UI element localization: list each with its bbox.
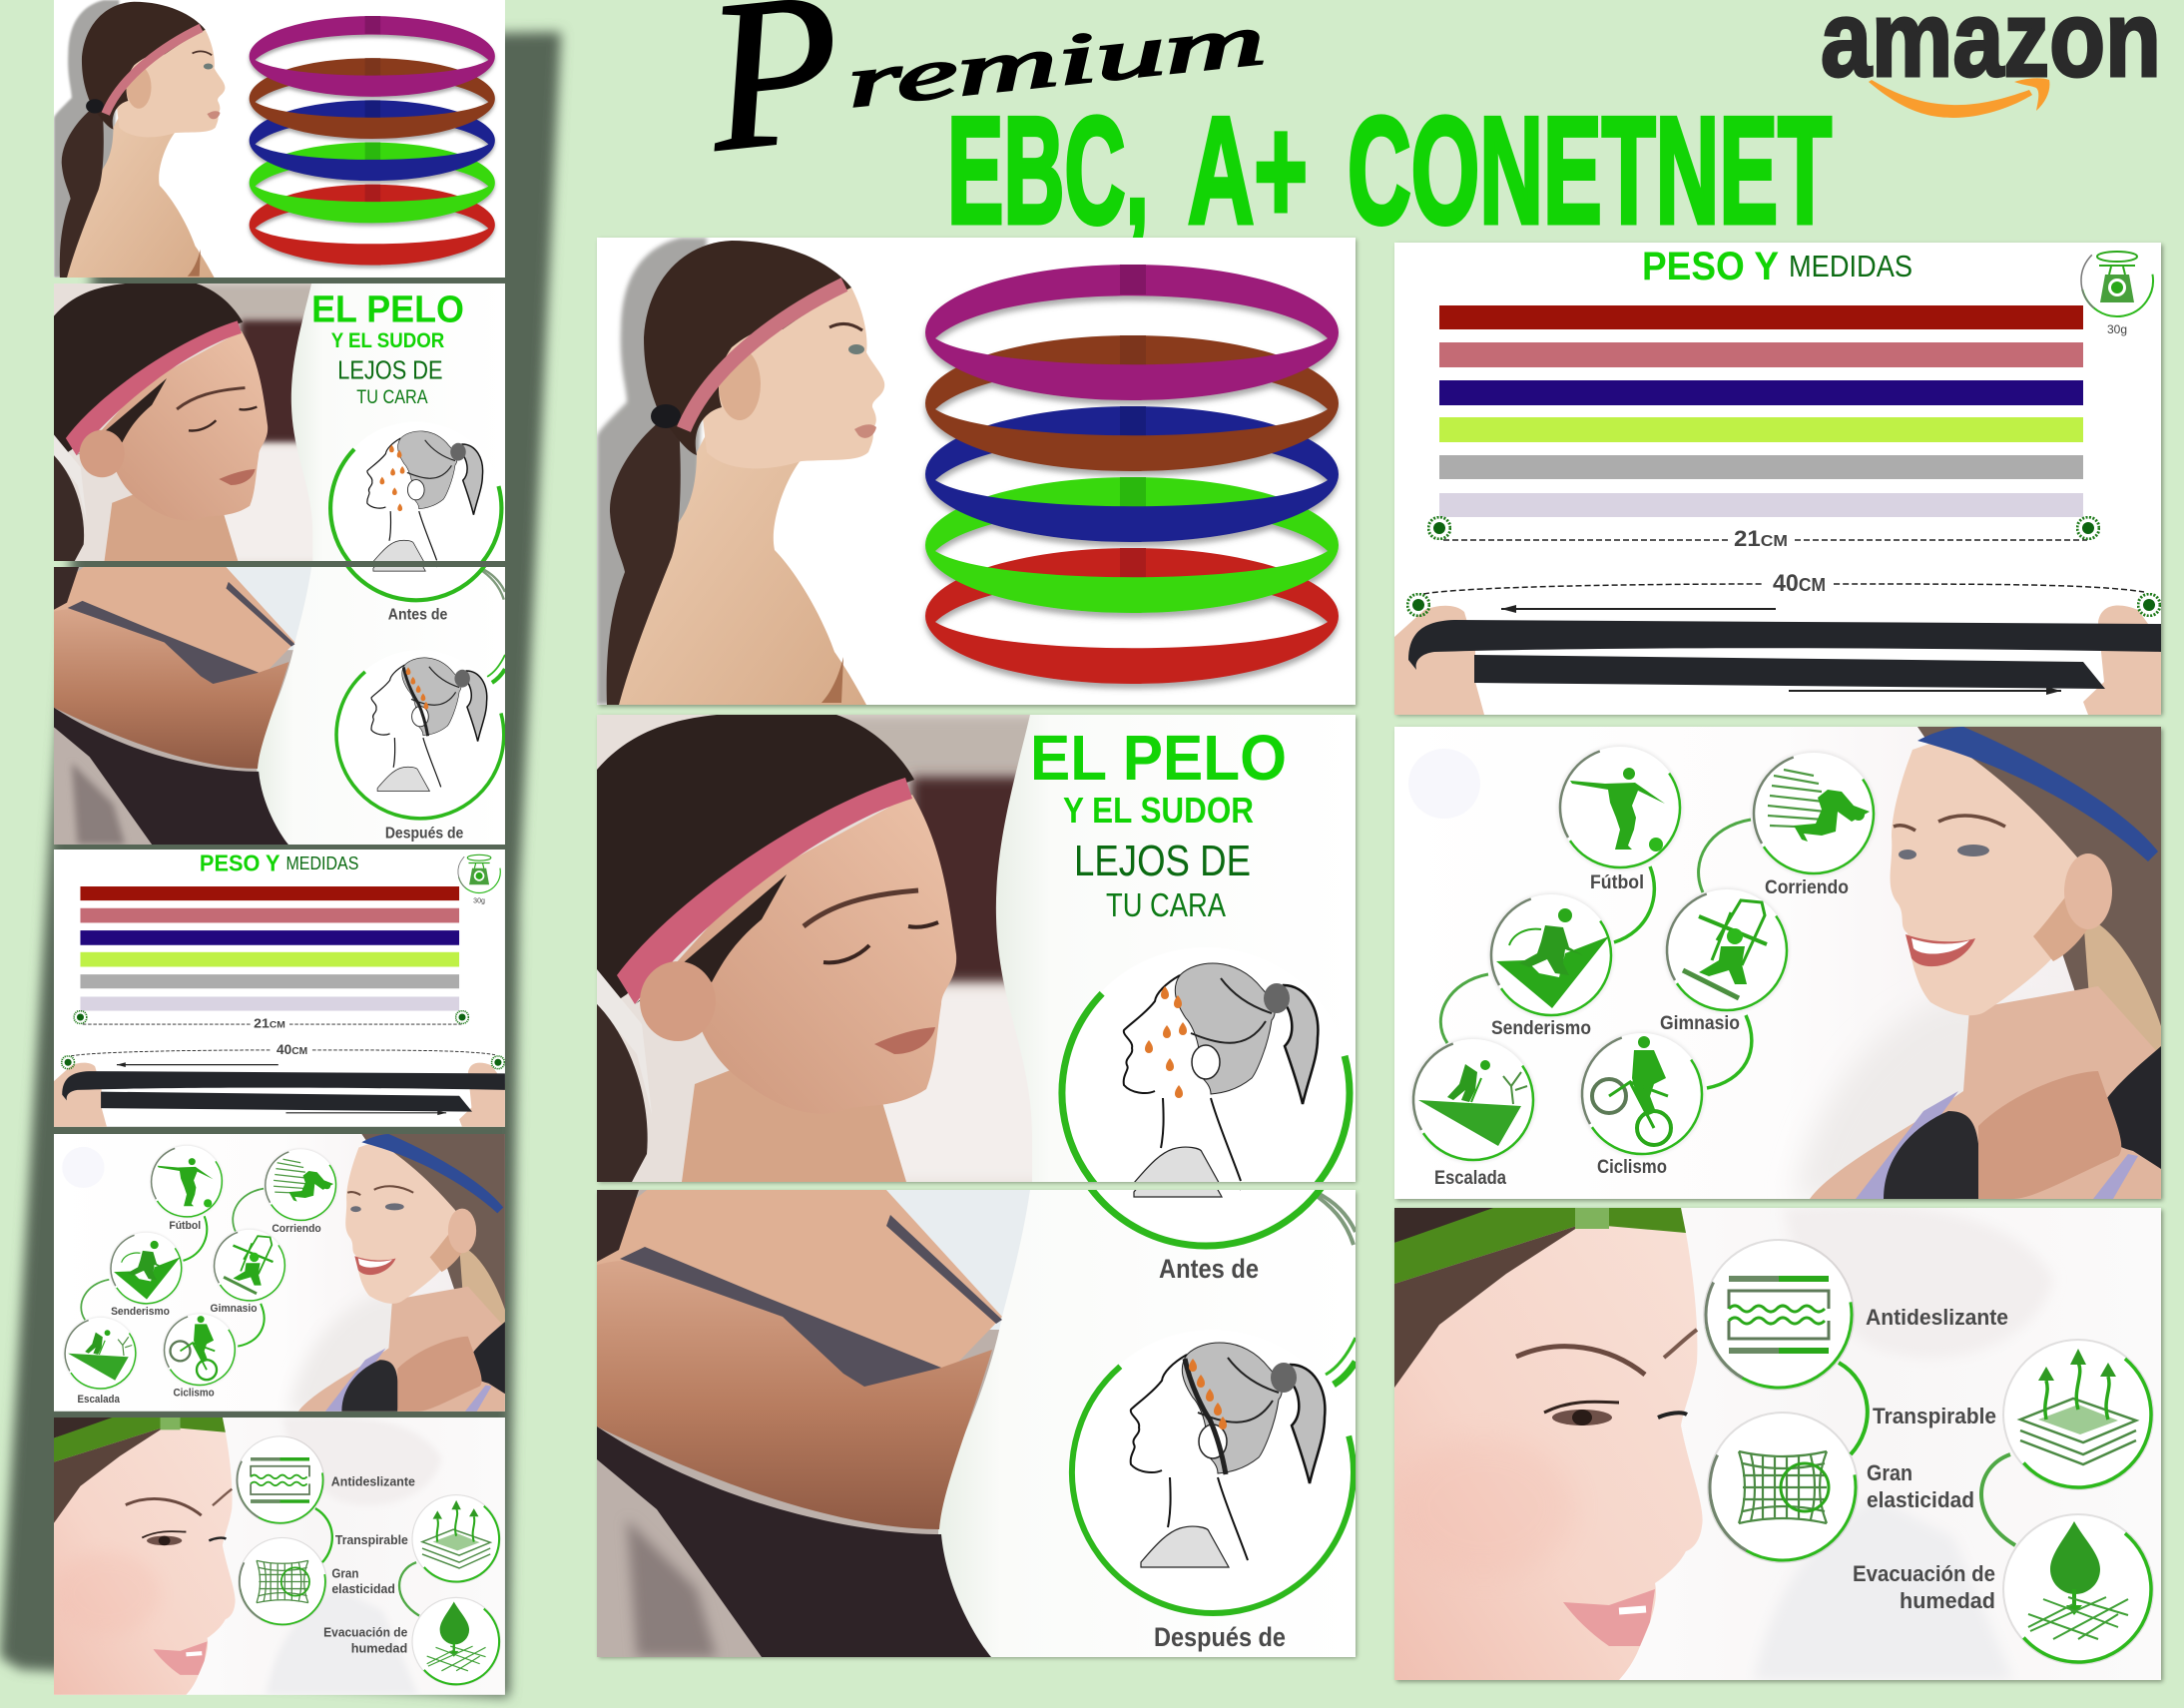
icon: cycling	[1558, 1010, 1726, 1178]
sport labels: Gimnasio	[211, 1303, 258, 1315]
sport labels: Fútbol	[1590, 872, 1644, 893]
icon: scale	[457, 854, 501, 894]
measure: 40cm: 40CM	[276, 1041, 307, 1057]
photo: woman wearing pink band	[54, 284, 505, 561]
feature labels: Gran	[331, 1565, 359, 1580]
icon: moisture drop	[1975, 1486, 2181, 1692]
panel: weight and measures	[1394, 230, 2168, 715]
icon: breathable layers	[396, 1478, 517, 1599]
heading: El pelo y el sudor lejos de tu cara: Y EL SUDOR	[1063, 790, 1254, 831]
heading: Peso y medidas: PESO Y	[200, 851, 280, 876]
feature labels: humedad	[351, 1641, 407, 1656]
icon: football	[138, 1132, 236, 1231]
heading: El pelo y el sudor lejos de tu cara: EL PELO	[311, 289, 464, 331]
panel: before and after (small)	[54, 567, 505, 845]
sport labels	[78, 1220, 321, 1406]
heading: medidas: MEDIDAS	[285, 854, 358, 873]
shadows of the main panels	[599, 240, 2163, 1682]
markers: measure end points	[62, 1011, 504, 1069]
panel: hair and sweat top	[597, 715, 1381, 1269]
photo: smiling woman with dumbbell	[54, 1134, 505, 1412]
label: Después de: Después de	[1154, 1622, 1286, 1652]
sport labels: Ciclismo	[173, 1388, 215, 1400]
sport labels	[1434, 872, 1849, 1189]
icon: head circle continued	[345, 567, 487, 603]
amazon logo	[1821, 0, 2161, 118]
panel: features	[1394, 1205, 2181, 1692]
heading: El pelo y el sudor lejos de tu cara: LEJOS DE	[1074, 837, 1251, 885]
sport labels: Senderismo	[111, 1306, 170, 1318]
sport labels: Fútbol	[169, 1220, 201, 1232]
heading: El pelo y el sudor lejos de tu cara: Y EL SUDOR	[331, 328, 444, 352]
label: 30g: 30g	[473, 897, 485, 904]
amazon smile arrow	[1869, 78, 2049, 118]
heading: El pelo y el sudor lejos de tu cara	[1030, 722, 1287, 923]
title: Premium script: remium	[843, 0, 1269, 123]
icon: moisture drop	[396, 1581, 517, 1702]
feature labels: Transpirable	[1873, 1404, 1996, 1428]
measure: 40cm: 40CM	[1773, 570, 1826, 597]
colour strips and stretched band	[1394, 243, 2161, 715]
icon: running	[252, 1136, 349, 1234]
measure: 21cm: 21CM	[254, 1016, 285, 1031]
heading: El pelo y el sudor lejos de tu cara: EL PELO	[1030, 722, 1287, 794]
panel: hair and sweat top (small)	[54, 284, 505, 561]
icon: hiking	[97, 1219, 196, 1318]
icon: elastic net	[1683, 1388, 1883, 1587]
icon: anti-slip	[222, 1422, 338, 1538]
left column drop shadow	[0, 32, 561, 1697]
panel: weight and measures (small)	[54, 843, 509, 1127]
feature labels	[323, 1474, 415, 1656]
heading: medidas: MEDIDAS	[1789, 249, 1912, 284]
title: EBC, A+ CONETNET: CONETNET	[1348, 86, 1832, 256]
photo: woman wearing pink band	[597, 715, 1356, 1182]
feature labels: Antideslizante	[1866, 1305, 2008, 1330]
markers: measure end points	[1407, 517, 2160, 616]
heading: El pelo y el sudor lejos de tu cara	[313, 295, 463, 403]
panel: before and after	[597, 926, 1385, 1657]
icon: cycling	[151, 1301, 249, 1399]
icon: scale	[2066, 230, 2168, 331]
panel: product overview (small)	[54, 0, 505, 278]
icon: head with sweat	[1030, 917, 1381, 1269]
panel: product overview	[597, 238, 1356, 705]
panel: sports (small)	[51, 1132, 505, 1412]
feature labels: humedad	[1900, 1588, 1995, 1613]
feature labels	[1853, 1305, 2008, 1613]
photo: face close-up with green band	[54, 1416, 505, 1695]
icon: climbing	[51, 1305, 150, 1403]
icon: gym	[201, 1217, 298, 1315]
sport labels: Escalada	[78, 1394, 121, 1406]
measure: 21cm: 21CM	[1734, 526, 1788, 551]
photo: woman and five headbands	[54, 0, 505, 278]
icon: running	[1730, 730, 1898, 897]
photo: woman's torso	[54, 567, 505, 845]
label: Después de: Después de	[385, 824, 463, 842]
sport labels: Corriendo	[272, 1223, 321, 1235]
photo: face close-up with green band	[1394, 1205, 2161, 1680]
feature labels: Gran	[1867, 1460, 1912, 1485]
photo: smiling woman with dumbbell	[1394, 727, 2161, 1199]
icon: hiking	[1467, 871, 1635, 1039]
feature labels: Transpirable	[335, 1532, 408, 1547]
label: Antes de: Antes de	[388, 605, 447, 623]
heading: El pelo y el sudor lejos de tu cara: LEJOS DE	[337, 355, 443, 385]
icon: football	[1536, 724, 1704, 891]
feature labels: Evacuación de	[1853, 1561, 1995, 1586]
heading: Peso y: PESO Y	[1642, 245, 1779, 288]
feature labels: elasticidad	[1867, 1487, 1974, 1512]
colour strips and stretched band	[54, 850, 505, 1127]
panel: sports	[1389, 724, 2161, 1199]
sport labels: Gimnasio	[1660, 1013, 1740, 1034]
feature labels: Evacuación de	[323, 1625, 407, 1640]
heading: El pelo y el sudor lejos de tu cara: TU CARA	[356, 386, 428, 408]
icon: anti-slip	[1679, 1215, 1879, 1415]
photo: woman and five headbands	[597, 238, 1356, 705]
icon: head with band	[334, 657, 505, 821]
feature labels: elasticidad	[331, 1581, 395, 1596]
feature labels: Antideslizante	[331, 1474, 415, 1489]
sport labels: Corriendo	[1765, 877, 1849, 898]
panel: features (small)	[54, 1416, 517, 1702]
sport labels: Ciclismo	[1597, 1157, 1667, 1178]
icon: climbing	[1389, 1016, 1557, 1184]
title: EBC, A+ CONETNET: EBC,	[947, 86, 1149, 256]
icon: gym	[1643, 866, 1811, 1034]
icon: elastic net	[224, 1523, 341, 1640]
sport labels: Escalada	[1434, 1168, 1506, 1189]
title: EBC, A+ CONETNET: A+	[1188, 86, 1308, 256]
icon: head with sweat	[328, 431, 503, 561]
label: 30g: 30g	[2107, 322, 2127, 336]
sport labels: Senderismo	[1491, 1018, 1591, 1039]
label: Antes de: Antes de	[1159, 1254, 1259, 1284]
icon: head with band	[1040, 1300, 1385, 1645]
icon: head circle continued	[1030, 926, 1381, 1278]
heading: El pelo y el sudor lejos de tu cara: TU CARA	[1106, 886, 1226, 923]
icon: breathable layers	[1975, 1312, 2181, 1517]
photo: woman's torso	[597, 1190, 1356, 1657]
